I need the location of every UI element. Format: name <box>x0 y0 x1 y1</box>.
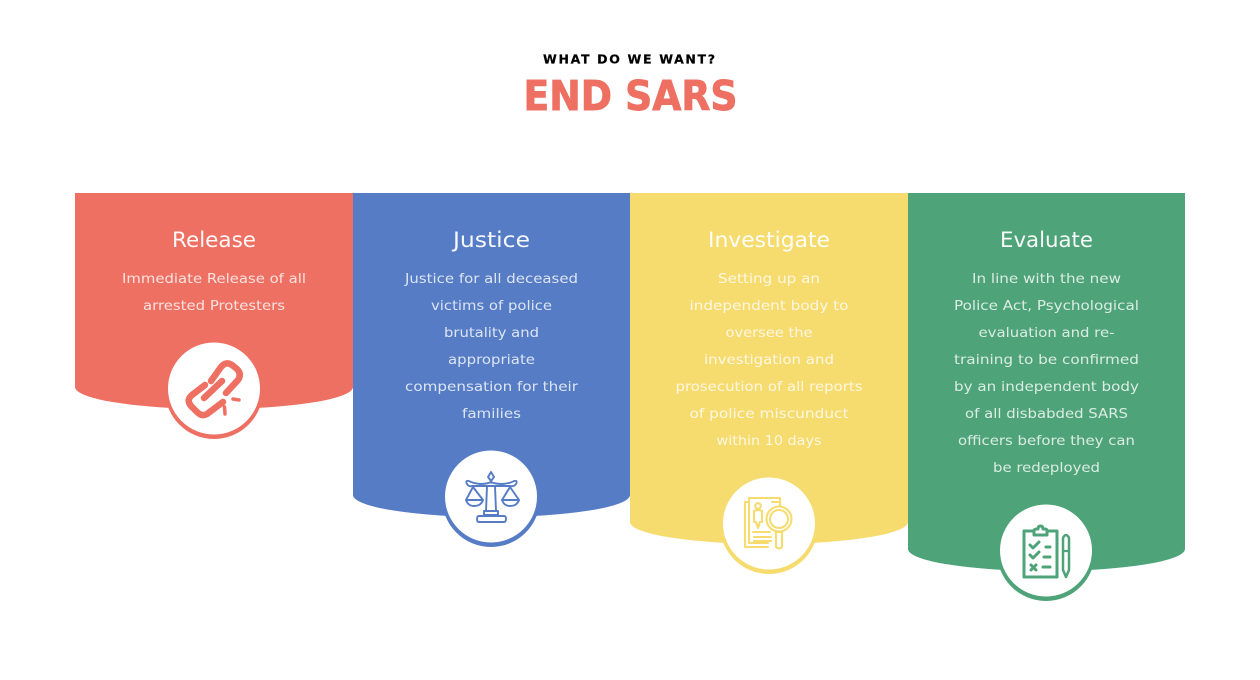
investigate description: Setting up an <box>718 271 820 287</box>
panel: evaluate <box>908 193 1185 601</box>
evaluate description: In line with the new <box>972 271 1121 287</box>
investigate background <box>630 193 908 544</box>
evaluate description: of all disbabded SARS <box>965 406 1128 422</box>
investigate description: investigation and <box>704 352 834 368</box>
eyebrow heading: WHAT DO WE WANT? <box>543 52 715 66</box>
release background <box>75 193 353 409</box>
release description: Immediate Release of all <box>122 271 306 287</box>
justice icon badge <box>442 449 540 547</box>
icon: document and magnifying glass <box>745 498 792 548</box>
justice description: victims of police <box>431 298 552 314</box>
evaluate description <box>954 271 1139 476</box>
icon: clipboard checklist and pen <box>1024 526 1069 577</box>
investigate description: oversee the <box>726 325 812 341</box>
release heading: Release <box>172 228 256 252</box>
investigate icon badge <box>720 476 818 574</box>
evaluate description: training to be confirmed <box>954 352 1139 368</box>
investigate heading: Investigate <box>708 228 830 252</box>
release icon badge <box>165 341 263 439</box>
evaluate description: Police Act, Psychological <box>954 298 1139 314</box>
investigate description: within 10 days <box>716 433 822 449</box>
investigate description <box>676 271 862 449</box>
investigate description: prosecution of all reports <box>676 379 862 395</box>
investigate description: of police miscunduct <box>690 406 848 422</box>
release description: arrested Protesters <box>143 298 285 314</box>
evaluate description: evaluation and re- <box>978 325 1115 341</box>
evaluate description: be redeployed <box>993 460 1100 476</box>
justice description <box>404 271 579 422</box>
panel: justice <box>353 193 630 547</box>
justice description: families <box>462 406 521 422</box>
panel: release <box>75 193 353 439</box>
evaluate heading: Evaluate <box>1000 228 1093 252</box>
evaluate background <box>908 193 1185 571</box>
release description <box>122 271 306 314</box>
panel: investigate <box>630 193 908 574</box>
justice description: brutality and <box>444 325 539 341</box>
title: END SARS <box>524 72 738 120</box>
justice description: compensation for their <box>405 379 579 395</box>
evaluate description: officers before they can <box>958 433 1135 449</box>
icon: scales of justice <box>466 472 519 522</box>
icon: broken chain link <box>189 363 240 415</box>
evaluate description: by an independent body <box>954 379 1139 395</box>
justice description: Justice for all deceased <box>404 271 578 287</box>
justice heading: Justice <box>451 228 530 252</box>
evaluate icon badge <box>997 503 1095 601</box>
justice description: appropriate <box>448 352 535 368</box>
investigate description: independent body to <box>690 298 848 314</box>
justice background <box>353 193 630 517</box>
